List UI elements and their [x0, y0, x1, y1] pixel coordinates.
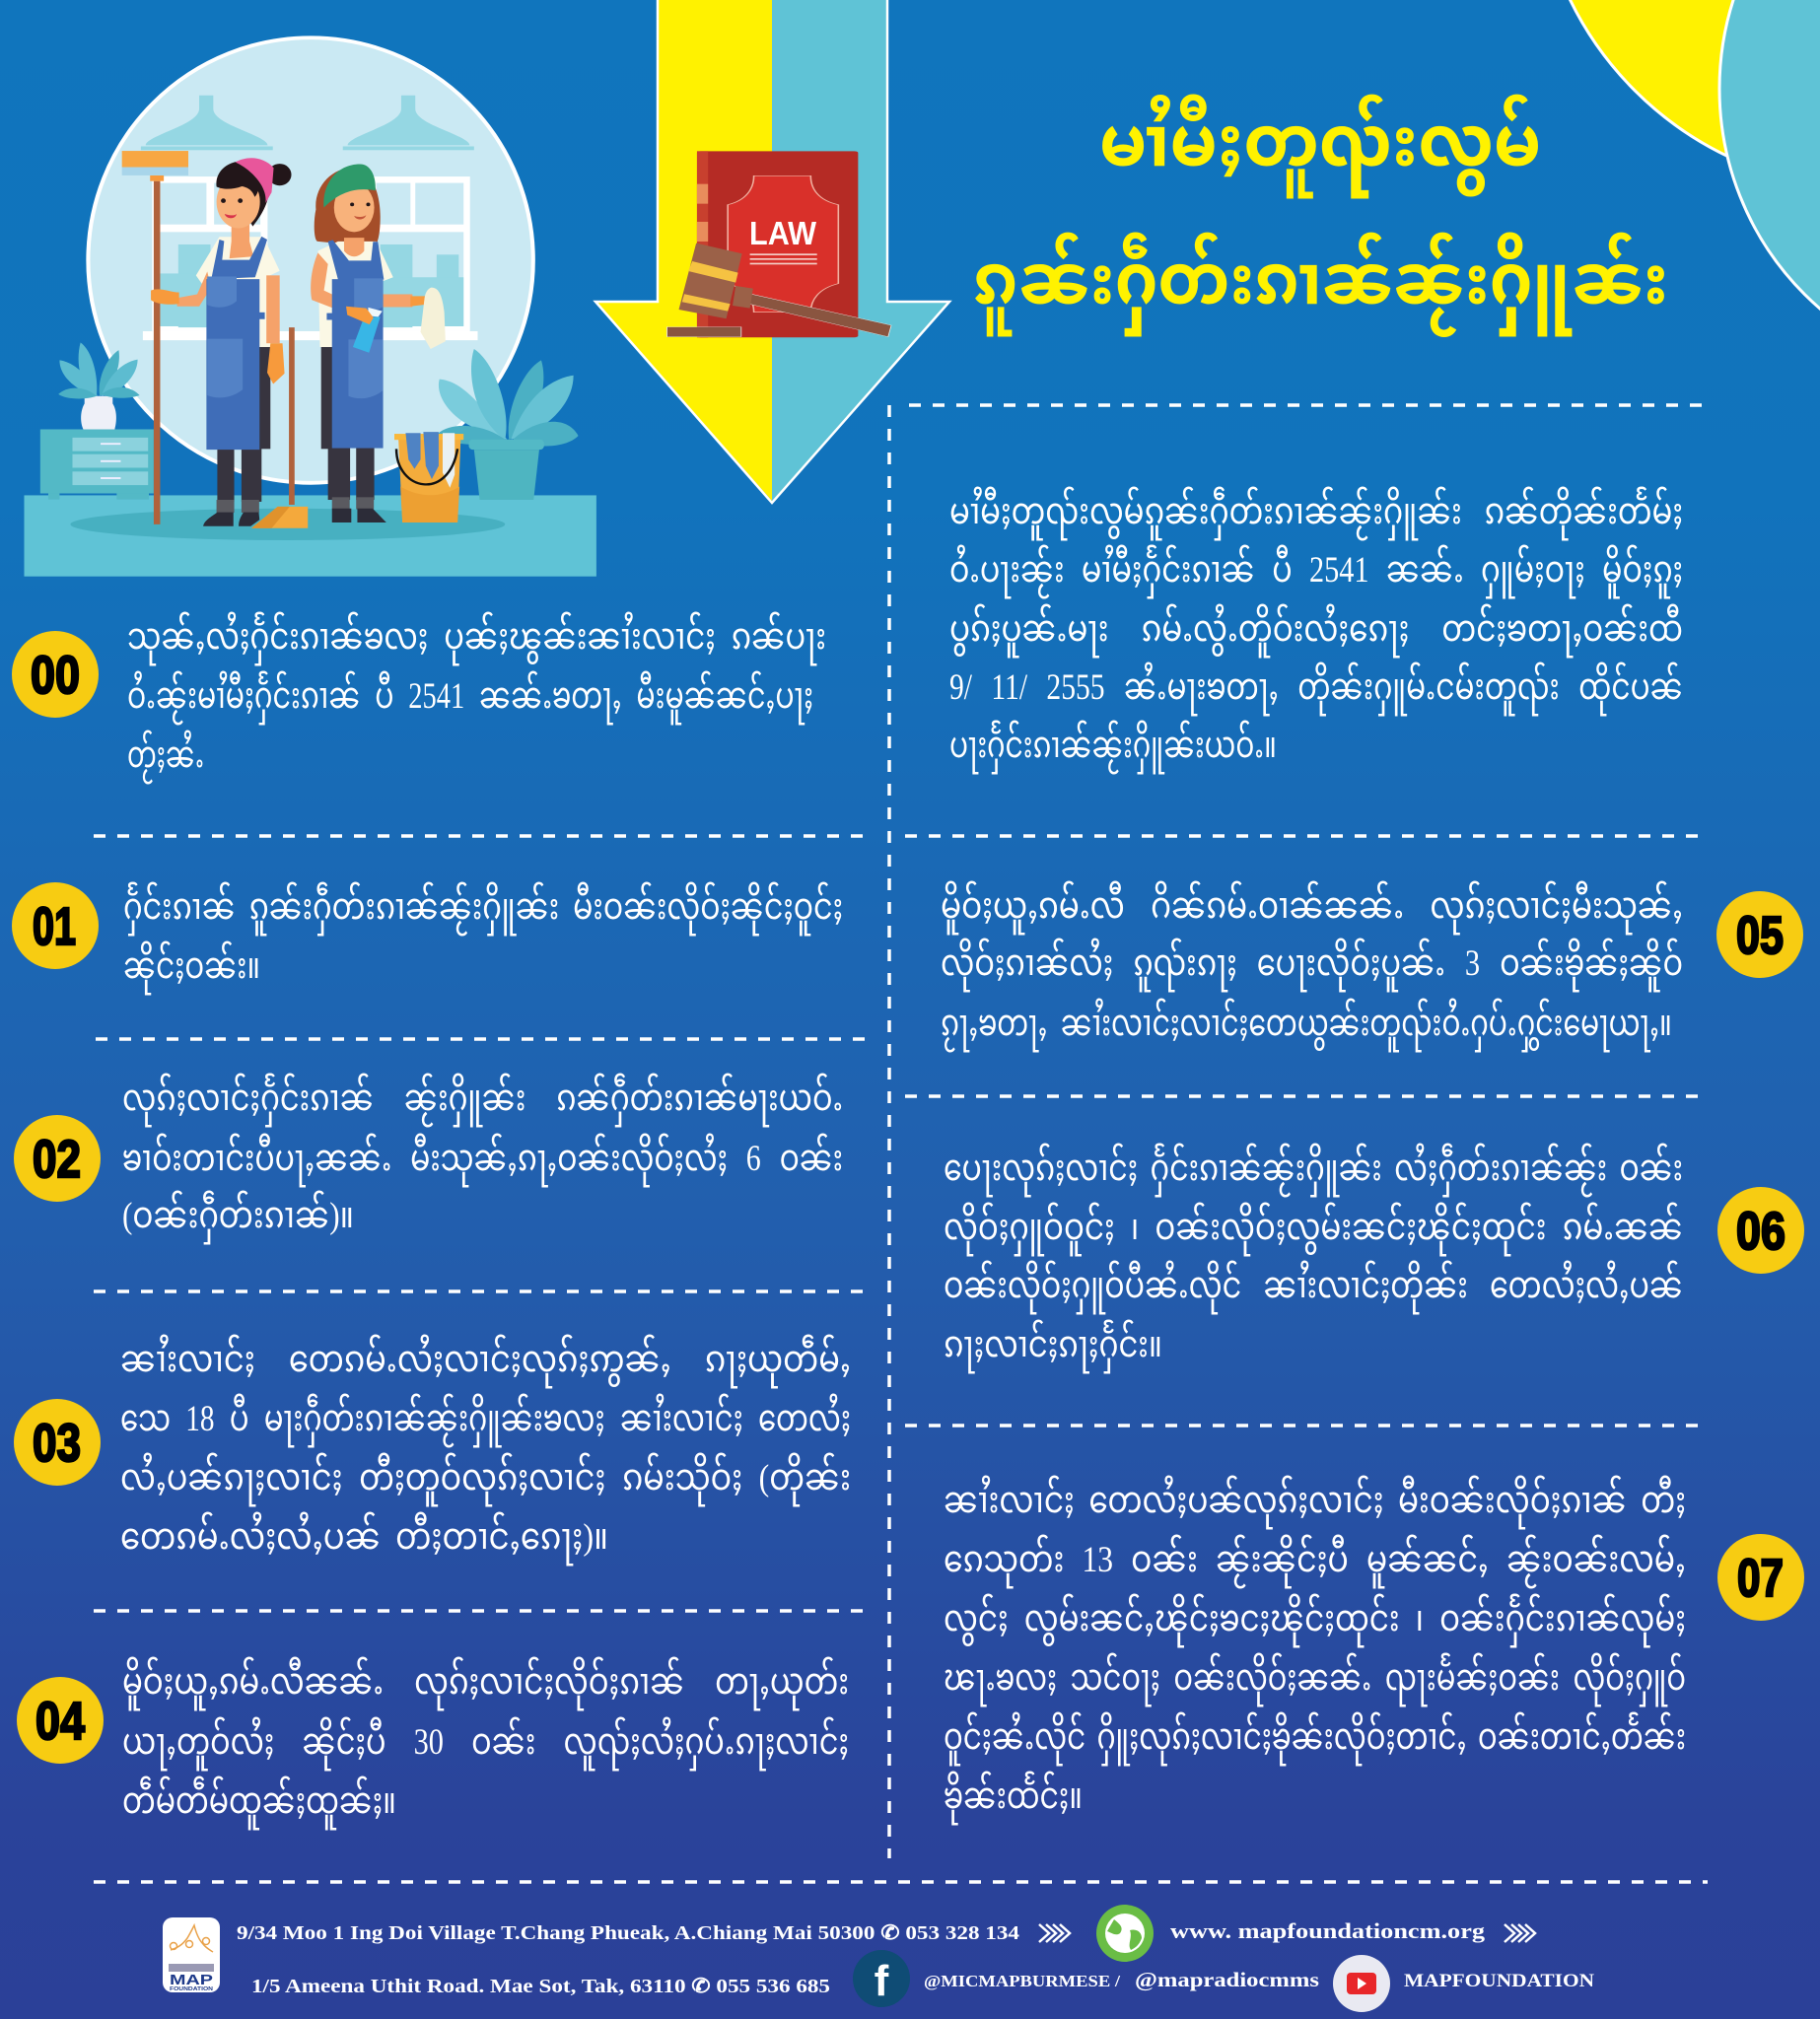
item 04 [17, 1657, 849, 1830]
text 02: (ဝၼ်းႁဵတ်းၵၢၼ်)။ [122, 1191, 354, 1244]
item 00 [12, 612, 826, 784]
broom and dustpan [251, 327, 308, 528]
bucket with gloves [394, 432, 463, 522]
badge 00: 00 [31, 646, 80, 705]
intro text block [949, 487, 1683, 774]
badge 03: 03 [33, 1414, 81, 1473]
social handles: @mapradiocmms [1135, 1968, 1319, 1991]
badge 03 [14, 1399, 101, 1486]
text 03: သေ 18 ပီ မႃးႁဵတ်းၵၢၼ်ၼႂ်းႁိူၼ်းၶလႈ ၼၢႆးလၢင်ႈ တေလႆႈ [120, 1394, 851, 1447]
text 05 [941, 881, 1683, 1052]
text 02: လုၵ်ႈလၢင်ႈႁႅင်းၵၢၼ် ၼႂ်းႁိူၼ်း ၵၼ်ႁဵတ်းၵၢၼ်မႃးယဝ်ႉ [122, 1074, 843, 1127]
icon: youtube [1333, 1955, 1390, 2012]
logo: MAP Foundation [163, 1917, 220, 1992]
item 01 [12, 882, 843, 995]
vertical and horizontal dividers [94, 405, 1708, 1882]
text 06 [944, 1144, 1683, 1373]
icon: law book and gavel [667, 151, 891, 337]
badge 07 [1717, 1534, 1804, 1621]
item 02 [14, 1074, 843, 1244]
icon: chevrons [1039, 1924, 1070, 1942]
potted plant [438, 349, 579, 500]
logo: MAP Foundation: MAP [170, 1972, 213, 1988]
address: Mae Sot: 1/5 Ameena Uthit Road. Mae Sot, Tak, 63110 ✆ 055 536 685 [251, 1976, 830, 1997]
text 06: လိုဝ်ႈႁူဝ်ဝူင်ႈ ၊ ဝၼ်းလိုဝ်ႈလွမ်းၼင်ႈၽိုင်ႈထုင်း ၵမ်ႉၼၼ် [944, 1203, 1683, 1256]
website: www. mapfoundationcm.org [1170, 1918, 1485, 1943]
icon: law book and gavel: LAW [749, 215, 817, 251]
icon: globe [1096, 1905, 1154, 1962]
badge 06: 06 [1736, 1202, 1785, 1261]
intro text block: ပွၵ်ႈပူၼ်ႉမႃး ၵမ်ႉလွႆႉတိူဝ်းလႆႈၵေႃႈ တင်ႈၶတႃႇဝၼ်းထီ [949, 604, 1683, 658]
social handles: @MICMAPBURMESE / [924, 1972, 1120, 1990]
youtube channel: MAPFOUNDATION [1404, 1971, 1594, 1991]
text 03 [120, 1335, 851, 1566]
intro text block: ဝႆႉပႃးၼႂ်း မၢႆမီႈႁႅင်းၵၢၼ် ပီ 2541 ၼၼ်ႉ ႁူမ်ႈဝႃႈ မိူဝ်ႈၵူႈ [949, 545, 1683, 598]
text 00: သုၼ်ႇလႆႈႁႅင်းၵၢၼ်ၶလႈ ပုၼ်ႈၽွၼ်းၼၢႆးလၢင်ႈ ၵၼ်ပႃး [127, 612, 826, 665]
text 03: လႆႇပၼ်ၵႃႈလၢင်ႈ တီႈတူဝ်လုၵ်ႈလၢင်ႈ ၵမ်းသိုဝ်ႈ (တိုၼ်း [120, 1453, 851, 1506]
footer [163, 1905, 1594, 2012]
item 05 [941, 881, 1803, 1052]
title: ၵူၼ်းႁဵတ်းၵၢၼ်ၼႂ်းႁိူၼ်း [973, 232, 1668, 337]
icon: facebook: f [875, 1957, 889, 2005]
text 07: ၶိုၼ်းထႅင်ႈ။ [944, 1772, 1083, 1825]
intro text block: ပႃးႁႅင်းၵၢၼ်ၼႂ်းႁိူၼ်းယဝ်ႉ။ [949, 721, 1277, 774]
item 06 [944, 1144, 1804, 1373]
intro text block: မၢႆမီႈတူၺ်းလွမ်ၵူၼ်းႁဵတ်းၵၢၼ်ၼႂ်းႁိူၼ်း ၵၼ်တိုၼ်းတႅမ်ႈ [949, 487, 1683, 540]
mop [122, 151, 188, 524]
badge 06 [1717, 1187, 1804, 1274]
arrow pointing down [595, 0, 949, 503]
address: Chiang Mai: 9/34 Moo 1 Ing Doi Village T.Chang Phueak, A.Chiang Mai 50300 ✆ 053 328 134 [237, 1922, 1019, 1944]
badge 02 [14, 1115, 101, 1202]
text 03: တေၵမ်ႉလႆႈလႆႇပၼ် တီႈတၢင်ႇၵေႃႈ)။ [120, 1512, 608, 1566]
text 05: လိုဝ်ႈၵၢၼ်လႆႈ ၵူၺ်းၵႃႈ ပေႃးလိုဝ်ႈပူၼ်ႉ 3 ဝၼ်းၶိုၼ်ႈၼိူဝ် [941, 939, 1683, 992]
drawer cabinet with vase and plant [40, 342, 154, 500]
badge 05: 05 [1736, 906, 1784, 965]
text 00: တႂ်ႈၼႆႉ [127, 731, 204, 784]
badge 00 [12, 631, 99, 718]
badge 05 [1716, 891, 1803, 978]
text 05: မိူဝ်ႈယူႇၵမ်ႉလီ ဂိၼ်ၵမ်ႉဝၢၼ်ၼၼ်ႉ လုၵ်ႈလၢင်ႈမီးသုၼ်ႇ [941, 881, 1683, 935]
text 07: လွင်ႈ လွမ်းၼင်ႇၽိုင်ႈၶငႈၽိုင်ႈထုင်း ၊ ဝၼ်းႁႅင်းၵၢၼ်လုမ်ႈ [944, 1594, 1686, 1647]
text 04: မိူဝ်ႈယူႇၵမ်ႉလီၼၼ်ႉ လုၵ်ႈလၢင်ႈလိုဝ်ႈၵၢၼ် တႃႇယုတ်း [122, 1657, 849, 1710]
text 06: ၵႃႈလၢင်ႈၵႃႈႁႅင်း။ [944, 1320, 1162, 1373]
text 07 [944, 1476, 1686, 1825]
text 04: ယႃႇတူဝ်လႆႈ ၼိုင်ႈပီ 30 ဝၼ်း လူၺ်ႈလႆႈႁပ်ႉၵႃႈလၢင်ႈ [122, 1717, 849, 1771]
corner decoration: yellow and teal circles [1536, 0, 1820, 380]
text 01: ႁႅင်းၵၢၼ် ၵူၼ်းႁဵတ်းၵၢၼ်ၼႂ်းႁိူၼ်း မီးဝၼ်းလိုဝ်ႈၼိုင်ႈဝူင်ႈ [123, 882, 843, 936]
badge 04 [17, 1677, 104, 1764]
text 04 [122, 1657, 849, 1830]
text 04: တဵမ်တဵမ်ထူၼ်ႈထူၼ်ႈ။ [122, 1776, 396, 1830]
text 01: ၼိုင်ႈဝၼ်း။ [123, 941, 260, 995]
text 00 [127, 612, 826, 784]
badge 07: 07 [1737, 1549, 1784, 1608]
text 02: ၶၢဝ်းတၢင်းပီပႃႇၼၼ်ႉ မီးသုၼ်ႇၵႃႇဝၼ်းလိုဝ်ႈလႆႈ 6 ဝၼ်း [122, 1134, 843, 1187]
illustration: two domestic workers cleaning a room [24, 37, 596, 577]
icon: facebook [853, 1950, 910, 2007]
badge 01 [12, 882, 99, 969]
text 03: ၼၢႆးလၢင်ႈ တေၵမ်ႉလႆႈလၢင်ႈလုၵ်ႈဢွၼ်ႇ ၵႃႈယုတဵမ်ႇ [120, 1335, 851, 1388]
title [973, 94, 1668, 337]
worker with pink headband [151, 158, 292, 526]
text 07: ၵေသုတ်း 13 ဝၼ်း ၼႂ်းၼိုင်ႈပီ မူၼ်ၼင်ႇ ၼႂ်းဝၼ်းလမ်ႇ [944, 1535, 1686, 1588]
badge 02: 02 [33, 1130, 81, 1189]
logo: MAP Foundation: FOUNDATION [170, 1986, 214, 1992]
badge 04: 04 [35, 1692, 85, 1751]
worker with green headscarf [311, 164, 446, 522]
item 03 [14, 1335, 851, 1566]
text 07: ၼၢႆးလၢင်ႈ တေလႆႈပၼ်လုၵ်ႈလၢင်ႈ မီးဝၼ်းလိုဝ်ႈၵၢၼ် တီႈ [944, 1476, 1686, 1529]
social handles [924, 1968, 1319, 1991]
badge 01: 01 [33, 897, 76, 956]
title: မၢႆမီႈတူၺ်းလွမ် [1099, 94, 1541, 199]
icon: chevrons [1505, 1924, 1535, 1942]
text 01 [123, 882, 843, 995]
item 07 [944, 1476, 1804, 1825]
text 02 [122, 1074, 843, 1244]
text 00: ဝႆႉၼႂ်းမၢႆမီႈႁႅင်းၵၢၼ် ပီ 2541 ၼၼ်ႉၶတႃႇ မီးမူၼ်ၼင်ႇပႃႈ [127, 671, 813, 725]
